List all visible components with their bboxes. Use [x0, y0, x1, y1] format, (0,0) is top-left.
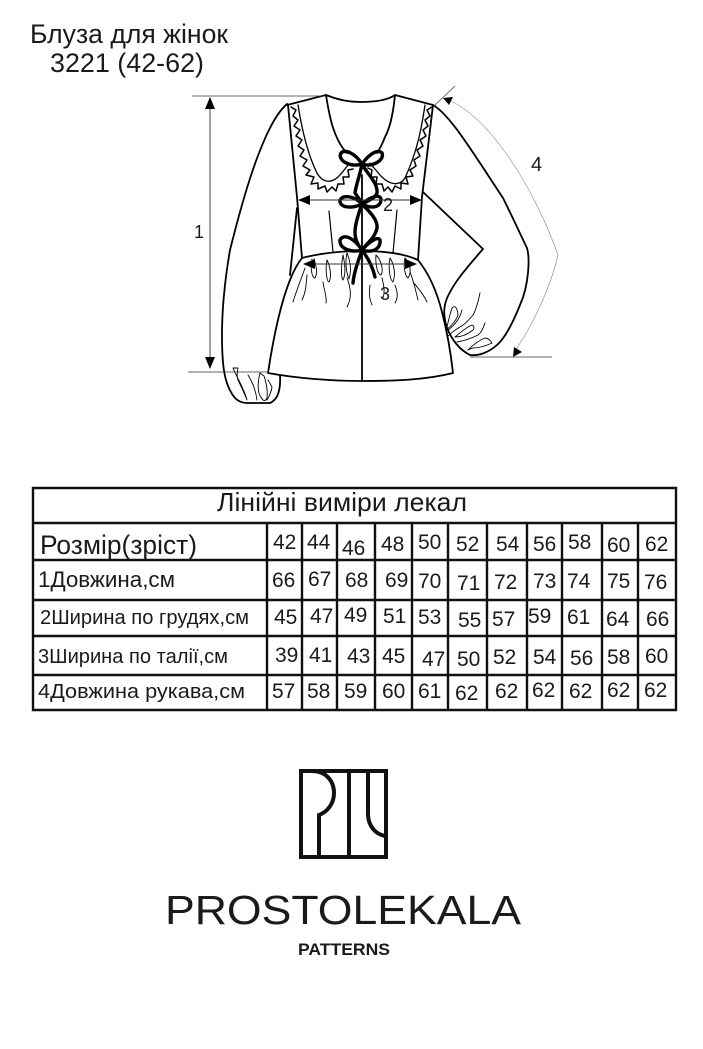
title [30, 19, 228, 78]
row: waist width: 41 [309, 644, 332, 667]
row labels: 2Ширина по грудях,см [40, 607, 249, 629]
row: waist width: 50 [457, 648, 480, 671]
row: chest width: 64 [606, 608, 630, 631]
row: sizes: 58 [568, 531, 591, 554]
row: sizes: 46 [342, 537, 365, 560]
right sleeve [423, 105, 529, 355]
row: waist width: 60 [645, 645, 668, 668]
row: chest width: 53 [418, 606, 441, 629]
ruffle left [291, 107, 353, 192]
logo subtitle: PATTERNS [298, 941, 390, 959]
gathers [293, 253, 427, 307]
row: waist width [275, 644, 668, 671]
row: sleeve length: 57 [272, 680, 295, 703]
row: waist width: 54 [533, 646, 557, 669]
row: waist width: 52 [493, 646, 516, 669]
arrowheads [205, 97, 522, 369]
row: waist width: 43 [347, 645, 370, 668]
row: sleeve length: 62 [607, 679, 630, 702]
left sleeve [222, 104, 297, 403]
row: sleeve length: 62 [644, 679, 667, 702]
bodice and collar [287, 95, 433, 260]
row: chest width: 51 [383, 605, 406, 628]
row: chest width: 66 [646, 608, 669, 631]
table grid [33, 488, 676, 710]
measurement numbers: 2 [383, 195, 393, 215]
row: waist width: 39 [275, 644, 298, 667]
row: sleeve length: 62 [495, 680, 518, 703]
row: sleeve length: 58 [307, 680, 330, 703]
darts [329, 210, 397, 253]
row: length: 67 [308, 568, 331, 591]
row: length: 74 [567, 570, 591, 593]
row: length: 70 [418, 570, 441, 593]
row: sizes: 44 [307, 531, 331, 554]
row: sizes: 54 [496, 533, 520, 556]
row: sizes [273, 531, 668, 560]
row: chest width: 45 [274, 606, 297, 629]
row: sleeve length: 61 [418, 680, 441, 703]
row: waist width: 45 [382, 645, 405, 668]
row: chest width: 61 [567, 606, 590, 629]
row: sizes: 42 [273, 531, 296, 554]
row: sleeve length: 62 [569, 680, 592, 703]
left cuff gathers [233, 368, 272, 401]
row labels: 4Довжина рукава,см [38, 680, 245, 703]
row: chest width [274, 604, 669, 632]
row: length: 68 [345, 569, 368, 592]
row: sleeve length: 62 [455, 682, 478, 705]
row: chest width: 47 [310, 605, 333, 628]
row: sleeve length: 60 [382, 680, 405, 703]
row: length: 76 [644, 571, 667, 594]
row labels [38, 530, 249, 703]
garment technical drawing [222, 95, 529, 403]
row: sizes: 60 [607, 534, 630, 557]
title: 3221 (42-62) [50, 48, 204, 78]
measurement numbers: 4 [531, 154, 542, 176]
ruffle right [368, 107, 432, 192]
logo wordmark: PROSTOLEKALA [165, 887, 522, 933]
collar inner edges [298, 105, 425, 184]
row: waist width: 47 [422, 648, 445, 671]
row: sizes: 50 [418, 531, 441, 554]
row: sizes: 48 [381, 533, 404, 556]
table heading: Лінійні виміри лекал [217, 487, 467, 517]
measurement numbers: 3 [380, 284, 390, 304]
row labels: Розмір(зріст) [40, 530, 197, 560]
row: length: 71 [457, 572, 480, 595]
row: chest width: 55 [458, 609, 481, 632]
row: chest width: 59 [528, 605, 551, 628]
row: length: 72 [494, 571, 517, 594]
row: waist width: 56 [570, 647, 593, 670]
row: sizes: 62 [645, 533, 668, 556]
row labels: 1Довжина,см [38, 567, 175, 592]
row: length: 66 [272, 569, 295, 592]
title: Блуза для жінок [30, 19, 228, 49]
logo mark [301, 771, 386, 857]
bows and ties [340, 151, 382, 283]
row: length: 73 [533, 570, 556, 593]
table: pattern measurements [33, 487, 676, 710]
right cuff gathers [447, 293, 492, 350]
row: chest width: 49 [344, 604, 367, 627]
measurement numbers [194, 154, 542, 304]
row: length: 75 [607, 570, 630, 593]
row: sleeve length [272, 679, 667, 705]
row: length: 69 [385, 569, 408, 592]
peplum [268, 175, 453, 381]
measurement numbers: 1 [194, 222, 204, 242]
row: sizes: 52 [456, 533, 479, 556]
row labels: 3Ширина по талії,см [38, 646, 228, 668]
row: length [272, 568, 667, 595]
row: waist width: 58 [607, 646, 630, 669]
measurement lines [188, 86, 558, 372]
row: sleeve length: 59 [344, 680, 367, 703]
row: sizes: 56 [533, 533, 556, 556]
logo [165, 771, 522, 959]
row: sleeve length: 62 [532, 679, 555, 702]
row: chest width: 57 [492, 608, 515, 631]
